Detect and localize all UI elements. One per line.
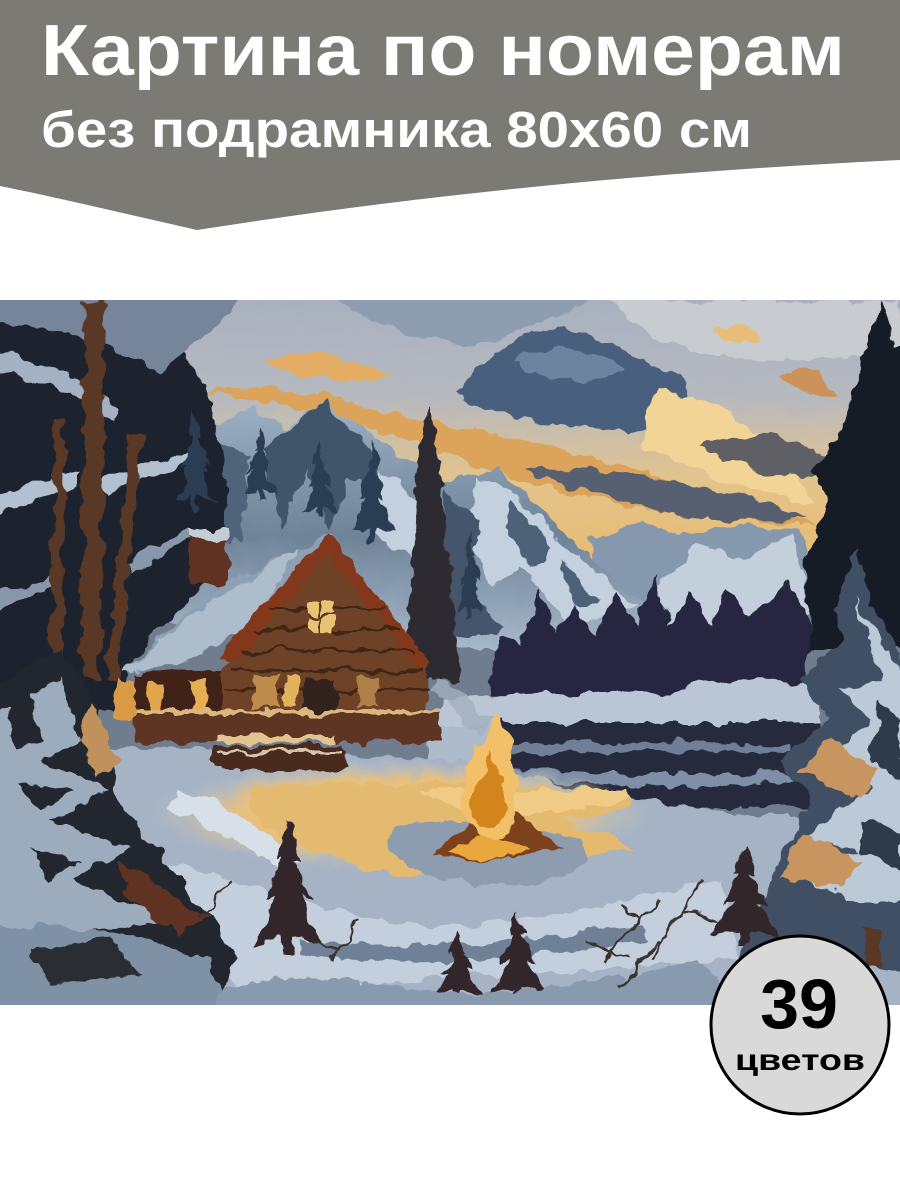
- foreground snow and brush: [210, 960, 760, 1025]
- sky: [0, 290, 900, 560]
- distant mountains: [590, 522, 830, 620]
- subtitle: без подрамника 80х60 см: [41, 101, 752, 158]
- lake: [490, 722, 820, 807]
- painting: winter cabin by a lake: [0, 290, 900, 1025]
- foreground small pines: [254, 820, 781, 1000]
- header banner: [0, 0, 900, 230]
- main mountains: [150, 395, 660, 650]
- steam: [430, 680, 490, 735]
- flames: [460, 715, 517, 837]
- badge label: цветов: [735, 1044, 865, 1077]
- campfire ring: [388, 715, 587, 885]
- cabin: [115, 530, 440, 770]
- tall pine behind cabin: [400, 403, 460, 680]
- far forest: [490, 575, 815, 695]
- snow foreground streaks: [150, 860, 740, 990]
- firelight on snow: [150, 760, 650, 880]
- snowy ground: [0, 747, 900, 1025]
- badge: 39 colours: [711, 936, 889, 1114]
- snowy far shore: [440, 678, 820, 725]
- right big trees: [735, 300, 900, 970]
- clouds: [205, 290, 900, 525]
- title: Картина по номерам: [41, 11, 845, 91]
- tree trunks: [50, 300, 142, 690]
- porch: [135, 710, 440, 770]
- badge number: 39: [760, 965, 838, 1043]
- left forest backdrop: [0, 290, 225, 710]
- left big snowy tree: [0, 650, 240, 1025]
- evergreen row on slope: [176, 410, 484, 620]
